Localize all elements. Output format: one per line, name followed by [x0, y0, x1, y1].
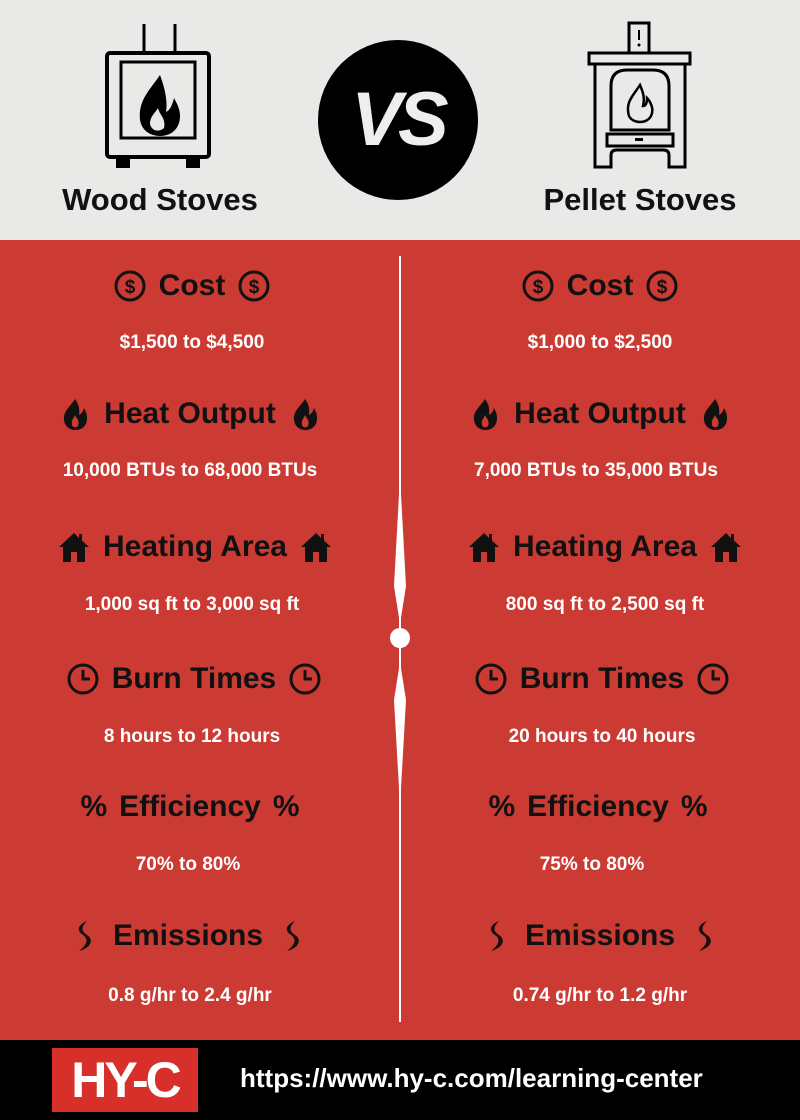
heat output: Heat Output: [514, 397, 686, 430]
heating area: Heating Area: [513, 530, 697, 563]
emissions: Emissions: [113, 919, 263, 952]
left column: $1,500 to $4,500: [120, 332, 264, 353]
divider: [390, 256, 410, 1022]
efficiency: %: [681, 790, 708, 823]
heat output: Heat Output: [104, 397, 276, 430]
emissions: [490, 919, 711, 952]
right column: 20 hours to 40 hours: [509, 726, 695, 747]
icon: VS circle: [318, 40, 478, 200]
cost: Cost: [567, 269, 633, 302]
cost: [114, 269, 270, 302]
heading: Pellet Stoves: Pellet Stoves: [544, 182, 736, 217]
logo: HY-C: HY-C: [71, 1052, 179, 1108]
right column: $1,000 to $2,500: [528, 332, 672, 353]
emissions: Emissions: [525, 919, 675, 952]
left column: 10,000 BTUs to 68,000 BTUs: [63, 460, 317, 481]
left column: 8 hours to 12 hours: [104, 726, 280, 747]
heat output: [64, 397, 317, 430]
right column: 7,000 BTUs to 35,000 BTUs: [474, 460, 718, 481]
burn times: [68, 662, 320, 695]
right column: 75% to 80%: [540, 854, 644, 875]
heating area: Heating Area: [103, 530, 287, 563]
left column: 70% to 80%: [136, 854, 240, 875]
cost: Cost: [159, 269, 225, 302]
left column: 0.8 g/hr to 2.4 g/hr: [108, 985, 272, 1006]
emissions: [78, 919, 299, 952]
icon: wood stove: [105, 24, 211, 168]
footer url: https://www.hy-c.com/learning-center: [240, 1063, 703, 1093]
logo: HY-C: [52, 1048, 198, 1112]
efficiency: Efficiency: [527, 790, 669, 823]
burn times: [476, 662, 728, 695]
efficiency: %: [488, 790, 515, 823]
left column: [59, 269, 331, 1006]
right column: [469, 269, 741, 1006]
heat output: [474, 397, 727, 430]
efficiency: [488, 790, 708, 823]
icon: pellet stove: [588, 22, 692, 168]
efficiency: %: [273, 790, 300, 823]
heading: Wood Stoves: Wood Stoves: [62, 182, 258, 217]
heating area: [59, 530, 331, 563]
efficiency: Efficiency: [119, 790, 261, 823]
icon: VS circle: VS: [351, 77, 445, 162]
burn times: Burn Times: [520, 662, 684, 695]
efficiency: %: [80, 790, 107, 823]
cost: [522, 269, 678, 302]
heating area: [469, 530, 741, 563]
burn times: Burn Times: [112, 662, 276, 695]
left column: 1,000 sq ft to 3,000 sq ft: [85, 594, 299, 615]
efficiency: [80, 790, 300, 823]
right column: 0.74 g/hr to 1.2 g/hr: [513, 985, 687, 1006]
right column: 800 sq ft to 2,500 sq ft: [506, 594, 704, 615]
